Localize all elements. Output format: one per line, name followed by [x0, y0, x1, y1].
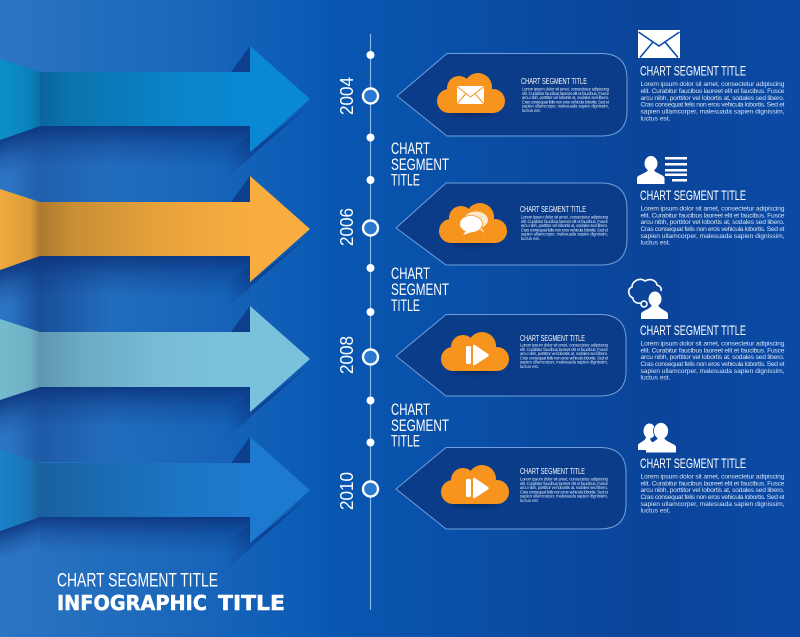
panel text: sapien ullamcorper, malesuada sapien dignissim,	[521, 232, 608, 237]
label between 2008 and 2010: SEGMENT	[391, 416, 449, 435]
arrow: orange	[0, 176, 310, 332]
right column block 1: CHART SEGMENT TITLE	[640, 62, 746, 78]
right column block 3: Cras consequat felis non eros vehicula lobortis. Sed et	[640, 361, 785, 368]
panel text: Lorem ipsum dolor sit amet, consectetur adipiscing	[520, 342, 609, 348]
year 2010: 2010	[337, 472, 357, 510]
panel text	[521, 76, 610, 113]
panel text: sapien ullamcorper, malesuada sapien dignissim,	[520, 360, 608, 365]
panel text: Lorem ipsum dolor sit amet, consectetur adipiscing	[521, 214, 609, 220]
right column block 4: elit. Curabitur faucibus laoreet elit et faucibus. Fusce	[640, 480, 785, 487]
label between 2008 and 2010	[391, 400, 449, 450]
label between 2008 and 2010: TITLE	[391, 432, 420, 450]
subtitle: CHART SEGMENT TITLE	[57, 570, 218, 592]
right column block 1: elit. Curabitur faucibus laoreet elit et faucibus. Fusce	[640, 88, 785, 95]
infographic title	[57, 591, 285, 615]
label between 2008 and 2010: CHART	[391, 400, 430, 419]
panel text	[520, 466, 609, 503]
icon: two people	[638, 422, 676, 452]
infographic title: TITLE	[218, 591, 285, 615]
right column block 2: CHART SEGMENT TITLE	[640, 187, 746, 203]
panel text: elit. Curabitur faucibus laoreet elit et faucibus. Fusce	[520, 481, 609, 486]
panel text: CHART SEGMENT TITLE	[520, 333, 585, 343]
panel text: Cras consequat felis non eros vehicula lobortis. Sed et	[520, 355, 609, 360]
right column block 4: arcu nibh, porttitor vel lobortis at, sodales sed libero.	[640, 487, 785, 494]
right column block 4: Lorem ipsum dolor sit amet, consectetur adipiscing	[640, 474, 785, 480]
right column block 3: sapien ullamcorper, malesuada sapien dignissim,	[640, 368, 785, 375]
timeline	[363, 34, 378, 610]
label between 2006 and 2008: SEGMENT	[391, 280, 449, 299]
infographic title: INFOGRAPHIC	[57, 591, 207, 615]
right column block 3	[640, 322, 785, 382]
right column block 4: Cras consequat felis non eros vehicula lobortis. Sed et	[640, 494, 785, 501]
arrow: blue	[0, 46, 310, 202]
right column block 1: sapien ullamcorper, malesuada sapien dignissim,	[640, 108, 785, 116]
right column block 4	[640, 455, 785, 515]
panel text	[520, 333, 609, 369]
panel text: CHART SEGMENT TITLE	[520, 204, 586, 214]
panel text: CHART SEGMENT TITLE	[521, 76, 587, 86]
arrow: mid blue	[0, 437, 310, 568]
panel text: Lorem ipsum dolor sit amet, consectetur adipiscing	[522, 86, 610, 92]
panel text: Cras consequat felis non eros vehicula lobortis. Sed et	[522, 99, 610, 104]
year 2008: 2008	[337, 336, 357, 374]
icon: person with text lines	[637, 156, 687, 184]
panel text: luctus est.	[521, 236, 540, 241]
right column block 1: Cras consequat felis non eros vehicula lobortis. Sed et	[640, 102, 785, 109]
panel text: arcu nibh, porttitor vel lobortis at, sodales sed libero.	[522, 95, 609, 100]
icon: cloud with play button	[441, 465, 509, 507]
right column block 1	[640, 62, 785, 122]
arrow: light teal	[0, 306, 310, 462]
panel text	[520, 204, 609, 241]
right column block 1: luctus est.	[640, 116, 671, 122]
panel text: luctus est.	[520, 498, 539, 503]
panel text: luctus est.	[520, 364, 539, 369]
panel text: elit. Curabitur faucibus laoreet elit et faucibus. Fusce	[521, 219, 609, 224]
right column block 2: arcu nibh, porttitor vel lobortis at, sodales sed libero.	[640, 219, 785, 226]
panel text: sapien ullamcorper, malesuada sapien dignissim,	[522, 104, 609, 109]
panel: 2008	[396, 314, 626, 396]
panel text: Cras consequat felis non eros vehicula lobortis. Sed et	[521, 227, 609, 232]
icon: person with thought cloud	[629, 279, 668, 319]
icon: cloud with envelope	[437, 73, 505, 116]
right column block 3: CHART SEGMENT TITLE	[640, 322, 746, 338]
right column block 2	[640, 187, 785, 247]
year 2004: 2004	[337, 77, 357, 115]
right column block 1: arcu nibh, porttitor vel lobortis at, sodales sed libero.	[640, 95, 785, 102]
icon: cloud with play button	[441, 332, 509, 374]
right column block 4: CHART SEGMENT TITLE	[640, 455, 746, 471]
panel text: arcu nibh, porttitor vel lobortis at, sodales sed libero.	[520, 351, 608, 356]
label between 2006 and 2008: TITLE	[391, 296, 420, 315]
label between 2006 and 2008: CHART	[391, 264, 430, 283]
icon: cloud with speech bubbles	[439, 203, 507, 246]
panel: 2004	[397, 54, 627, 136]
panel text: Cras consequat felis non eros vehicula lobortis. Sed et	[520, 489, 609, 494]
right column block 3: luctus est.	[640, 375, 671, 382]
label between 2004 and 2006: CHART	[391, 139, 430, 158]
icon: envelope	[638, 30, 680, 58]
panel text: CHART SEGMENT TITLE	[520, 466, 585, 476]
label between 2004 and 2006: SEGMENT	[391, 155, 449, 174]
label between 2004 and 2006: TITLE	[391, 170, 420, 190]
right column block 1: Lorem ipsum dolor sit amet, consectetur adipiscing	[640, 81, 785, 88]
right column block 4: sapien ullamcorper, malesuada sapien dignissim,	[640, 501, 785, 508]
label between 2006 and 2008	[391, 264, 449, 315]
right column block 2: luctus est.	[640, 240, 671, 247]
panel text: Lorem ipsum dolor sit amet, consectetur adipiscing	[520, 476, 609, 482]
label between 2004 and 2006	[391, 139, 449, 190]
right column block 4: luctus est.	[640, 508, 671, 515]
panel: 2006	[396, 183, 627, 265]
year 2006: 2006	[337, 208, 357, 246]
right column block 3: arcu nibh, porttitor vel lobortis at, sodales sed libero.	[640, 354, 785, 361]
panel text: arcu nibh, porttitor vel lobortis at, sodales sed libero.	[520, 485, 608, 490]
right column block 3: Lorem ipsum dolor sit amet, consectetur adipiscing	[640, 340, 785, 348]
right column block 2: sapien ullamcorper, malesuada sapien dignissim,	[640, 233, 785, 240]
right column block 2: elit. Curabitur faucibus laoreet elit et faucibus. Fusce	[640, 212, 785, 219]
right column block 3: elit. Curabitur faucibus laoreet elit et faucibus. Fusce	[640, 347, 785, 354]
panel text: elit. Curabitur faucibus laoreet elit et faucibus. Fusce	[522, 91, 610, 96]
panel text: elit. Curabitur faucibus laoreet elit et faucibus. Fusce	[520, 347, 609, 352]
panel text: arcu nibh, porttitor vel lobortis at, sodales sed libero.	[521, 223, 608, 228]
panel text: luctus est.	[522, 108, 541, 113]
panel: 2010	[396, 448, 626, 529]
right column block 2: Cras consequat felis non eros vehicula lobortis. Sed et	[640, 226, 785, 233]
panel text: sapien ullamcorper, malesuada sapien dignissim,	[520, 494, 608, 499]
right column block 2: Lorem ipsum dolor sit amet, consectetur adipiscing	[640, 206, 785, 212]
